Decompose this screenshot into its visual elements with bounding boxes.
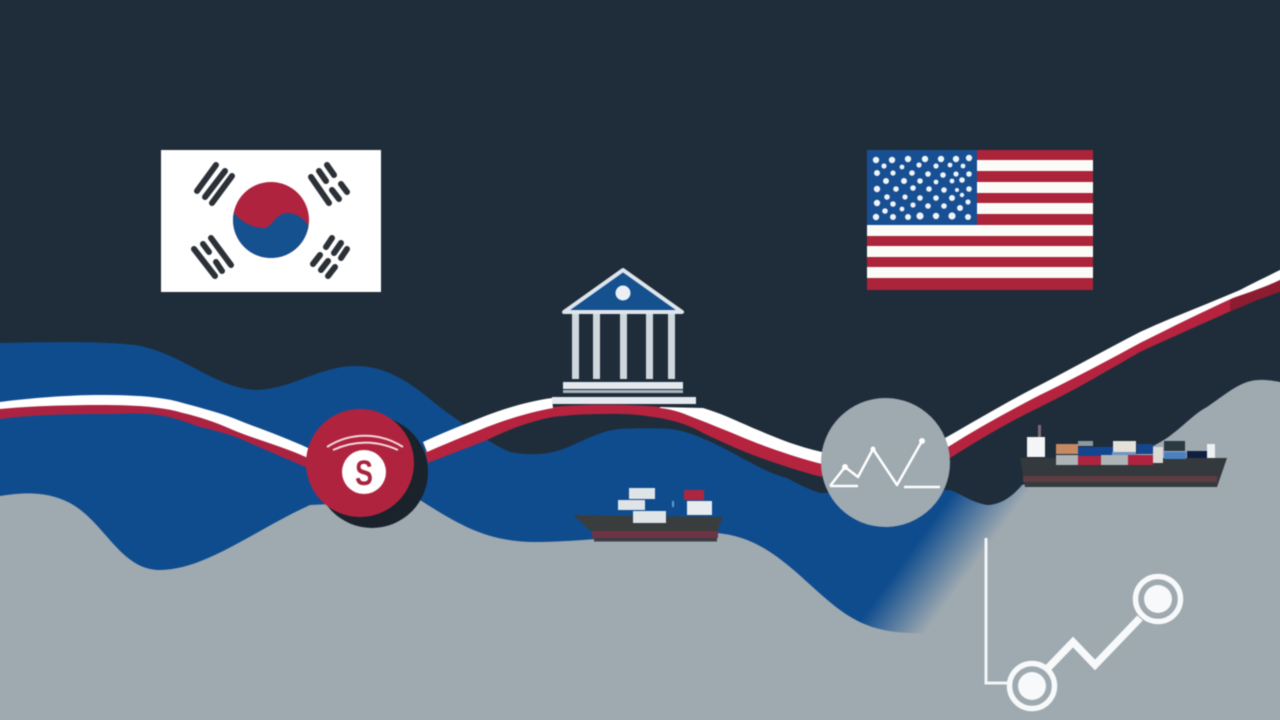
coin symbol: S <box>355 453 373 493</box>
bridge <box>1027 437 1045 457</box>
chart axis <box>986 538 1010 683</box>
canton <box>867 150 977 225</box>
ribbon: currency line <box>0 265 1280 477</box>
end marker <box>1136 576 1180 622</box>
stripes <box>867 150 1093 290</box>
coin arcs <box>327 436 403 450</box>
start marker <box>1010 664 1054 708</box>
ribbon middle white band left <box>423 398 553 452</box>
flag field <box>161 150 381 292</box>
large cargo ship <box>1020 425 1227 487</box>
chart points <box>842 438 925 470</box>
grey wave <box>0 380 1280 720</box>
ribbon left red band <box>0 404 310 469</box>
ribbon left white band <box>0 395 310 459</box>
blue wave <box>0 342 1030 640</box>
small line chart <box>830 441 940 487</box>
chart circle <box>821 398 950 527</box>
taegeuk <box>233 182 309 258</box>
ribbon right white band <box>945 265 1280 447</box>
columns <box>572 314 675 379</box>
growth chart <box>986 538 1180 708</box>
ribbon right dark tip <box>1230 274 1280 311</box>
Korean flag <box>161 150 381 292</box>
growth line <box>1048 618 1140 668</box>
pediment circle <box>616 286 630 300</box>
hull <box>1020 458 1227 487</box>
containers <box>1056 444 1078 454</box>
circle background <box>821 398 950 527</box>
bank building <box>552 270 696 404</box>
coin face <box>306 409 414 517</box>
hull stripe <box>592 531 718 538</box>
American flag <box>867 150 1093 290</box>
small cargo ship <box>573 488 723 542</box>
coin shadow <box>316 416 428 528</box>
steps <box>563 382 683 389</box>
stars <box>873 155 972 220</box>
ribbon middle red band <box>425 405 822 477</box>
pediment <box>564 270 682 312</box>
hull stripe <box>1023 476 1217 482</box>
currency coin <box>306 409 428 528</box>
ribbon middle white band right <box>660 407 822 464</box>
containers <box>629 488 655 499</box>
grey fade over blue <box>860 480 1040 640</box>
trigrams <box>194 165 347 276</box>
coin badge <box>342 450 386 494</box>
hull <box>573 515 723 532</box>
ribbon right red band <box>947 297 1233 458</box>
